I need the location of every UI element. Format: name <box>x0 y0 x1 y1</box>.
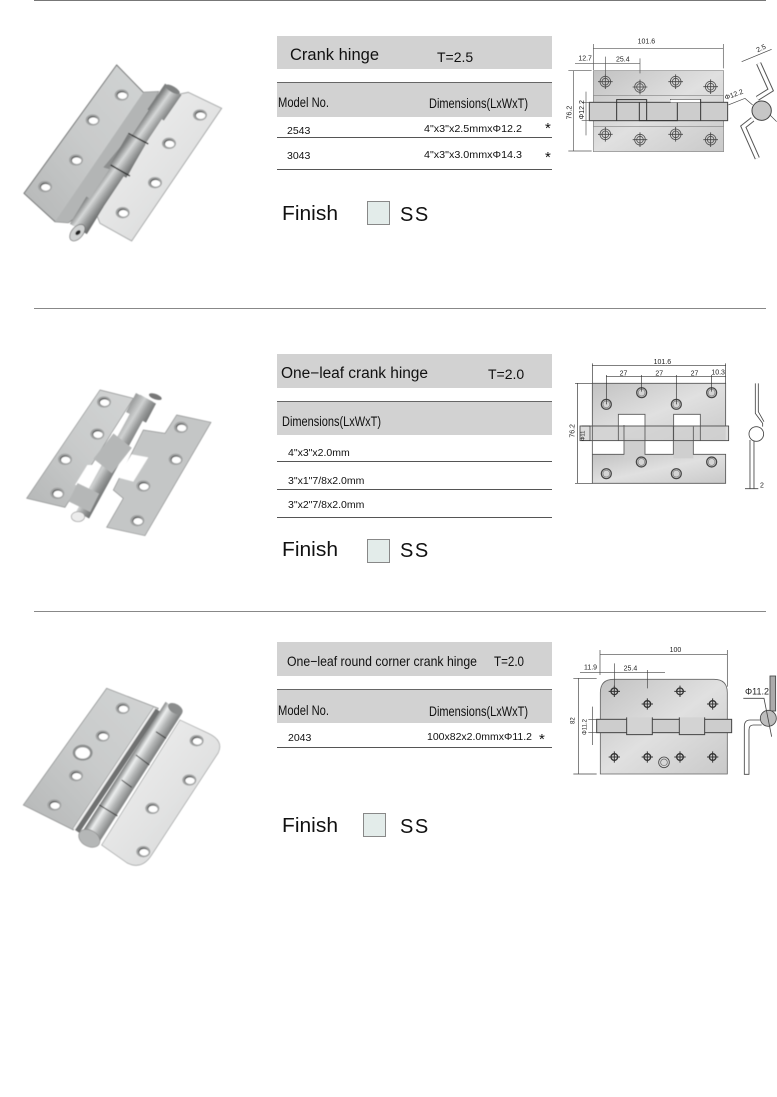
dimension labels: 25.4 <box>624 665 637 672</box>
spec table: one-leaf crank hinge: 3"x1"7/8x2.0mm <box>288 475 365 487</box>
spec table: round corner crank hinge: 2043 <box>288 732 312 744</box>
spec table: one-leaf crank hinge: Dimensions(LxWxT) <box>282 413 381 429</box>
screw holes <box>38 89 207 218</box>
spec table: round corner crank hinge: * <box>539 731 545 748</box>
dimension labels: 100 <box>670 647 681 654</box>
side profile <box>745 383 764 489</box>
finish: SS swatch: Finish <box>282 202 338 225</box>
dimension labels: 10.3 <box>711 369 725 376</box>
dimension labels: 12.7 <box>578 56 592 63</box>
photo: one-leaf crank hinge <box>27 390 211 536</box>
side profile <box>743 676 776 774</box>
dimension labels: 2 <box>760 482 764 489</box>
dimension labels: 2.5 <box>756 44 767 54</box>
plate front view <box>580 383 729 483</box>
finish: SS swatch <box>282 814 430 838</box>
right leaf <box>93 92 222 241</box>
barrel <box>71 392 162 522</box>
dimension labels: 101.6 <box>654 359 671 366</box>
divider line top <box>34 0 766 1</box>
dimension labels: Φ11 <box>581 431 587 441</box>
dimension labels: 101.6 <box>638 39 655 46</box>
photo: one-leaf round corner crank hinge <box>23 688 220 865</box>
dimension lines <box>568 44 723 151</box>
dimension labels: 76.2 <box>569 424 576 438</box>
title bar: one-leaf crank hinge: T=2.0 <box>488 366 524 382</box>
dimension labels: 27 <box>655 370 663 377</box>
dimension lines <box>573 650 727 774</box>
finish: SS swatch: SS <box>400 540 430 562</box>
technical drawing: round corner crank hinge <box>571 647 776 774</box>
right leaf <box>102 720 220 865</box>
technical drawing: crank hinge <box>566 39 777 158</box>
side profile <box>728 49 777 158</box>
title bar: round corner crank hinge: T=2.0 <box>494 654 524 669</box>
divider line middle <box>34 308 766 309</box>
finish: SS swatch: Finish <box>282 814 338 837</box>
dimension labels: Φ12.2 <box>579 100 586 119</box>
spec table: crank hinge: 3043 <box>287 150 311 162</box>
spec table: round corner crank hinge <box>277 689 552 748</box>
finish: SS swatch: Finish <box>282 538 338 561</box>
spec table: round corner crank hinge: Dimensions(LxWxT) <box>429 703 528 719</box>
screw holes <box>50 396 188 526</box>
title bar: round corner crank hinge <box>277 642 552 676</box>
finish: SS swatch: SS <box>400 204 430 226</box>
finish: SS swatch: SS <box>400 816 430 838</box>
dimension lines <box>575 363 726 483</box>
title bar: crank hinge: Crank hinge <box>290 45 379 64</box>
title bar: crank hinge <box>277 36 552 69</box>
spec table: crank hinge: * <box>545 120 551 137</box>
title bar: crank hinge: T=2.5 <box>437 49 473 65</box>
barrel <box>67 83 181 244</box>
spec table: crank hinge: Model No. <box>278 94 329 110</box>
dimension labels: Φ12.2 <box>724 89 744 102</box>
dimension labels: 25.4 <box>616 57 630 64</box>
dimension labels <box>566 39 767 119</box>
plate front view <box>597 679 732 774</box>
dimension labels: 11.9 <box>584 665 597 672</box>
left leaf <box>23 688 158 830</box>
dimension labels: 27 <box>691 370 699 377</box>
spec table: one-leaf crank hinge: 4"x3"x2.0mm <box>288 447 350 459</box>
dimension labels: Φ11.2 <box>583 718 589 735</box>
spec table: one-leaf crank hinge <box>277 401 552 518</box>
left leaf <box>24 65 158 223</box>
title bar: one-leaf crank hinge: One−leaf crank hinge <box>281 365 428 382</box>
spec table: crank hinge: * <box>545 149 551 166</box>
spec table: round corner crank hinge: Model No. <box>278 702 329 718</box>
spec table: crank hinge: 4"x3"x2.5mmxΦ12.2 <box>424 123 522 135</box>
spec table: one-leaf crank hinge: 3"x2"7/8x2.0mm <box>288 499 365 511</box>
spec table: crank hinge: 2543 <box>287 125 311 137</box>
dimension labels: 82 <box>571 717 577 724</box>
screw holes <box>47 703 204 857</box>
dimension labels: Φ11.2 <box>745 686 769 696</box>
spec table: crank hinge: 4"x3"x3.0mmxΦ14.3 <box>424 149 522 161</box>
barrel <box>74 701 185 851</box>
spec table: crank hinge: Dimensions(LxWxT) <box>429 95 528 111</box>
dimension labels: 76.2 <box>566 106 573 119</box>
dimension labels: 27 <box>620 370 628 377</box>
divider line lower <box>34 611 766 612</box>
plate front view <box>589 71 728 152</box>
technical drawing: one-leaf crank hinge <box>569 359 764 489</box>
spec table: round corner crank hinge: 100x82x2.0mmxΦ11.2 <box>427 731 532 743</box>
title bar: one-leaf crank hinge <box>277 354 552 388</box>
title bar: round corner crank hinge: One−leaf round corner crank hinge <box>287 653 477 669</box>
dimension labels <box>569 359 764 489</box>
photo: crank hinge <box>24 65 222 244</box>
left leaf <box>27 390 133 507</box>
right leaf <box>107 415 211 536</box>
finish: SS swatch <box>282 202 430 226</box>
spec table: crank hinge <box>277 82 552 170</box>
dimension labels <box>571 647 769 735</box>
finish: SS swatch <box>282 538 430 562</box>
